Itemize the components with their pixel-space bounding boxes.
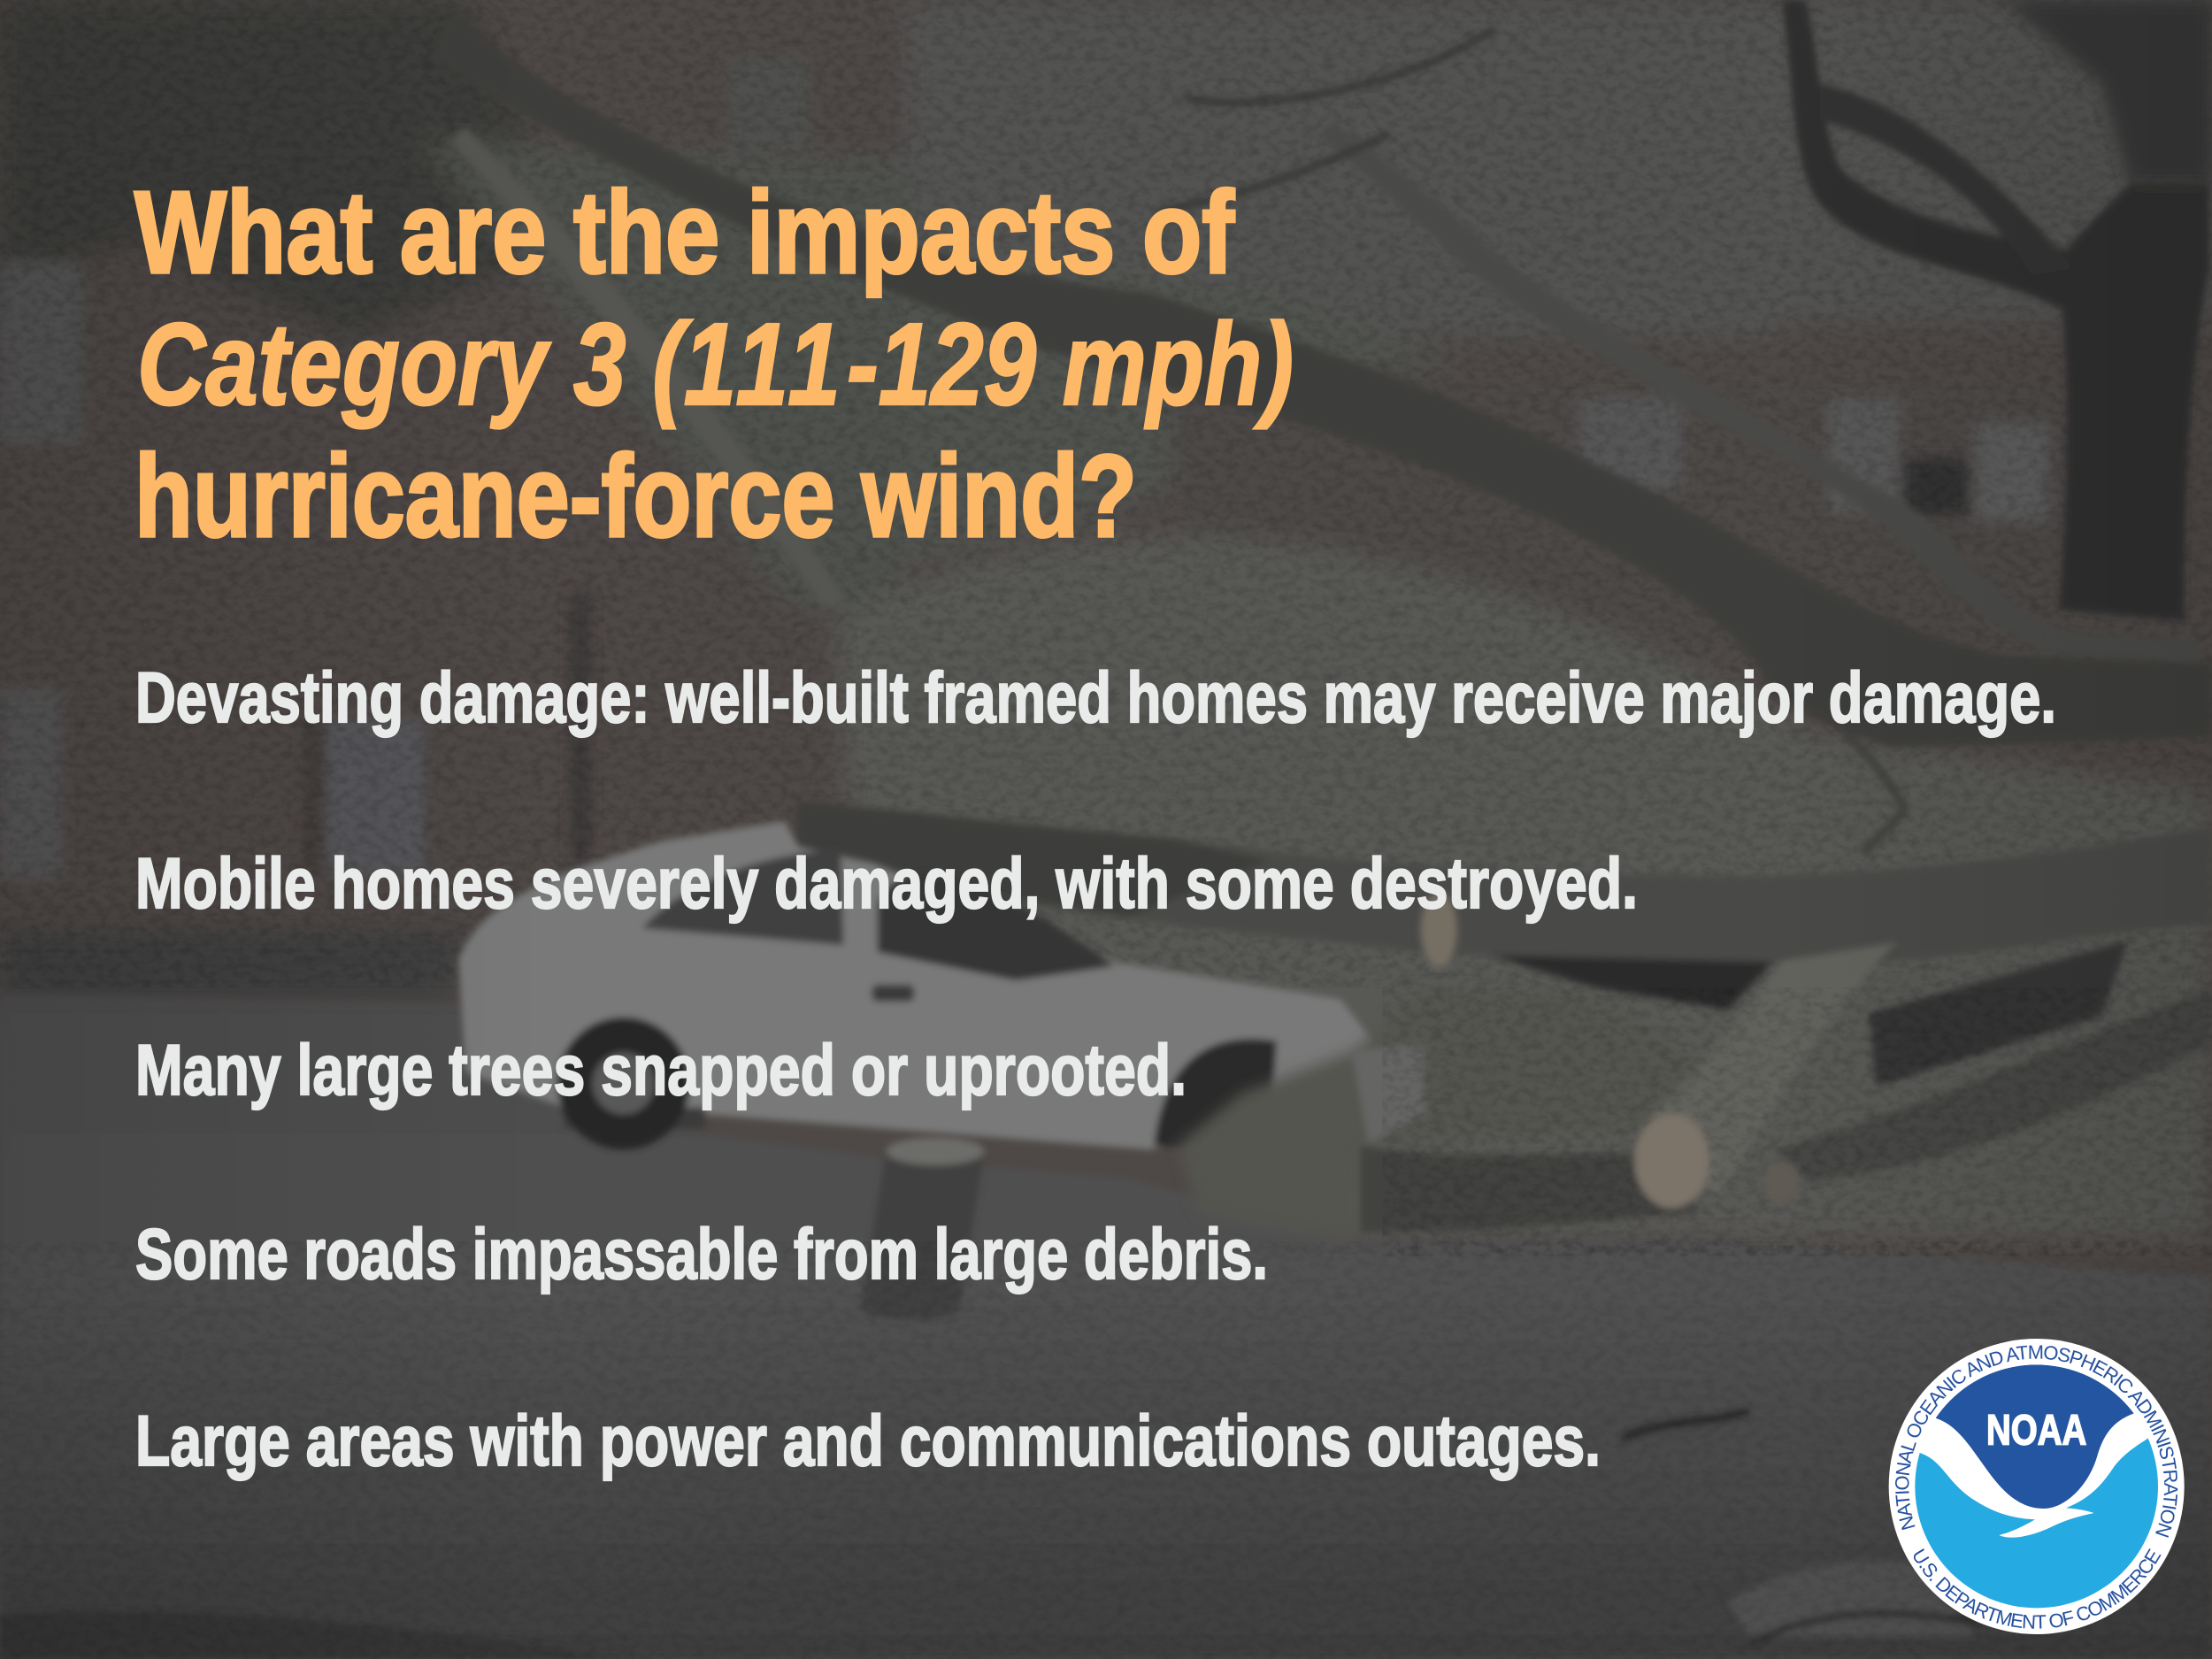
ground texture (0, 1241, 2212, 1659)
title: What are the impacts of (134, 167, 1235, 297)
impact list: Large areas with power and communications outages. (135, 1402, 1601, 1481)
buildings and foliage masses (0, 0, 2212, 1241)
building windows (0, 57, 2048, 879)
felled logs (797, 802, 2212, 1182)
debris on ground (0, 1410, 1975, 1659)
log cut ends (1421, 892, 1800, 1209)
impact list: Mobile homes severely damaged, with some destroyed. (135, 844, 1638, 924)
tree stump (861, 1137, 985, 1320)
title (134, 167, 1294, 561)
foreground foliage texture (1383, 987, 2212, 1256)
impact list (135, 658, 2056, 1481)
ground (0, 995, 2212, 1659)
NOAA logo: NATIONAL OCEANIC AND ATMOSPHERIC ADMINISTRATION (1895, 1345, 2178, 1538)
front logs (1351, 942, 1897, 1233)
foliage texture (0, 0, 2212, 987)
title: Category 3 (111-129 mph) (137, 299, 1294, 429)
white car (458, 821, 1376, 1149)
title: hurricane-force wind? (134, 431, 1137, 561)
impact list: Many large trees snapped or uprooted. (135, 1031, 1187, 1110)
NOAA logo: NOAA (1986, 1407, 2086, 1455)
foliage over car front (1178, 987, 1716, 1241)
NOAA logo: U.S. DEPARTMENT OF COMMERCE (1913, 1548, 2161, 1629)
NOAA logo (1888, 1339, 2185, 1634)
impact list: Some roads impassable from large debris. (135, 1215, 1268, 1294)
tree trunks and limbs (432, 0, 2212, 854)
